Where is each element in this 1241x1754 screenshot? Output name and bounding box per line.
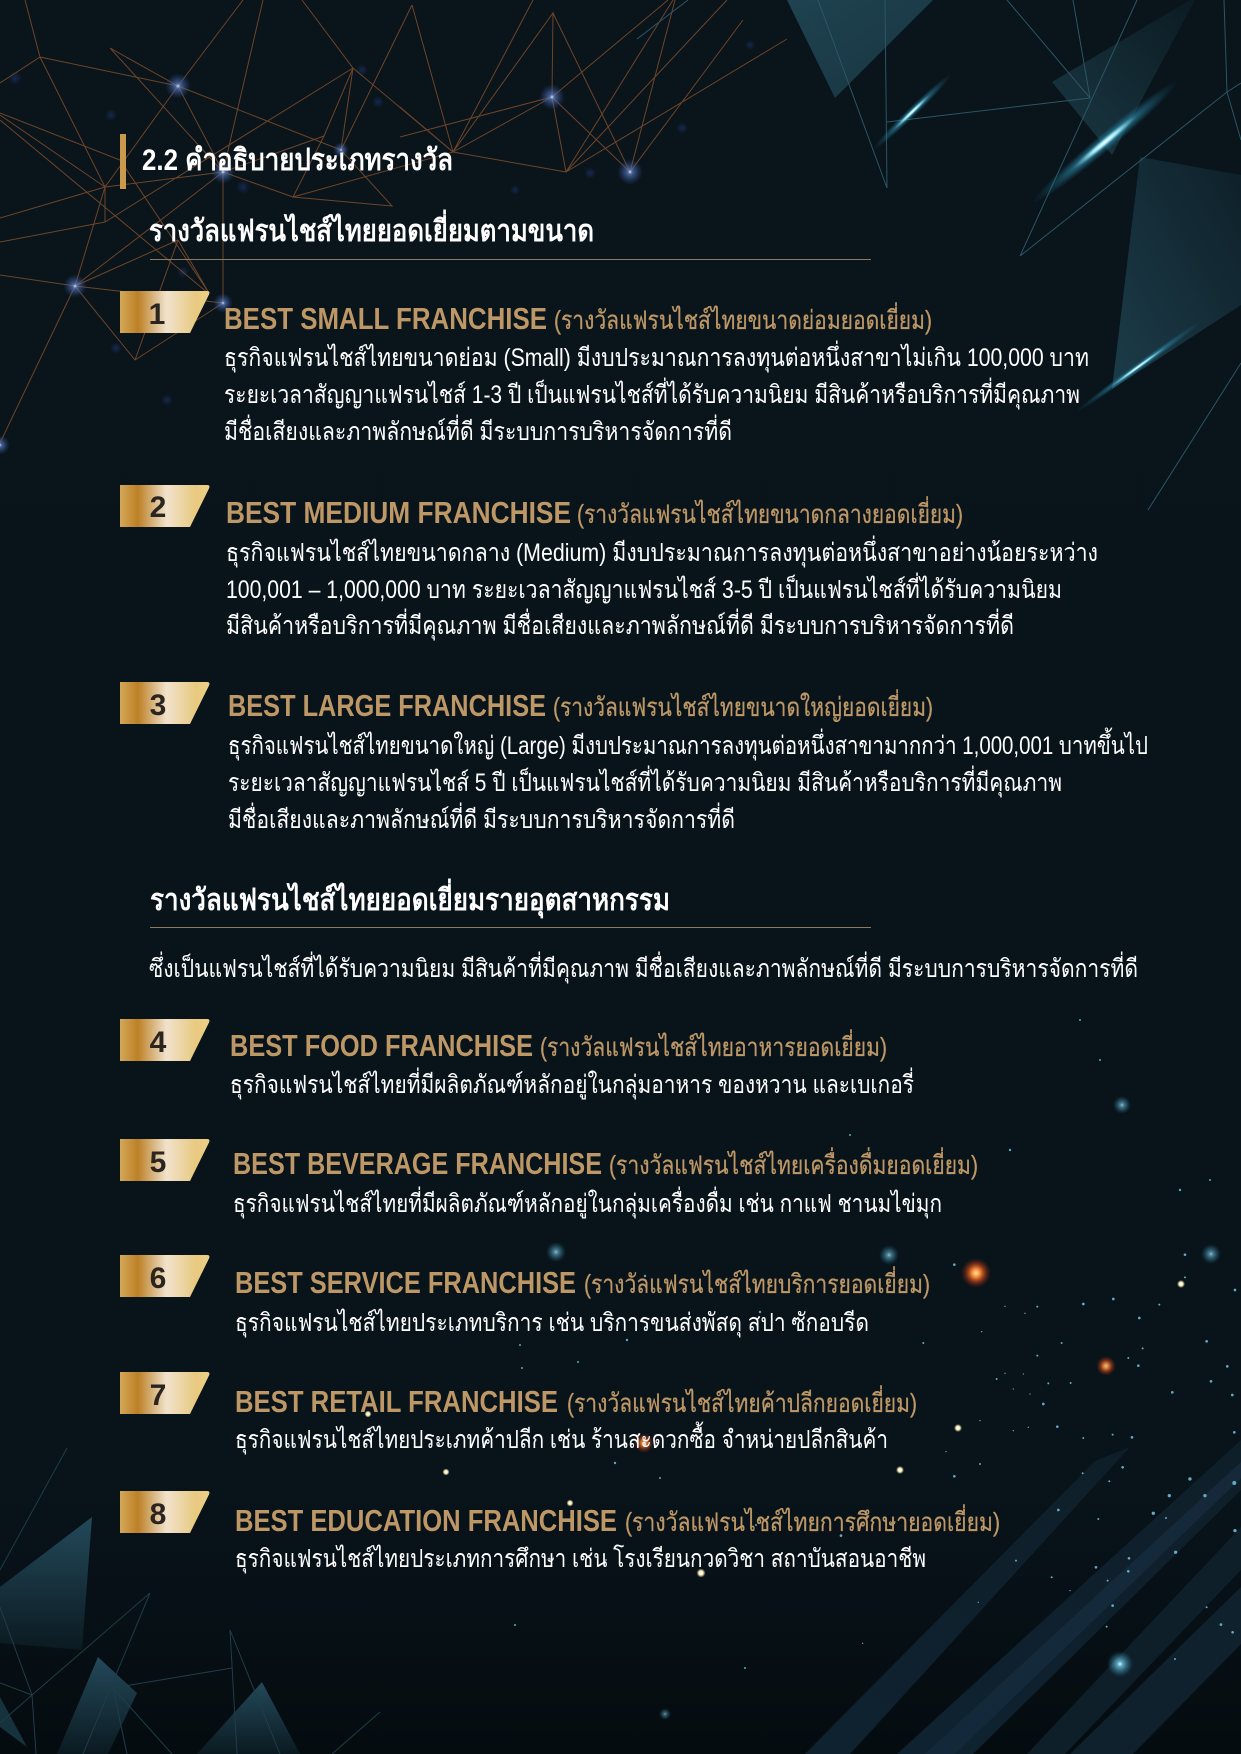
award 6 title bbox=[235, 1265, 930, 1300]
section title: 2.2 คำอธิบายประเภทรางวัล bbox=[142, 144, 453, 177]
number badge 8 bbox=[120, 1491, 209, 1533]
award 1 description: มีชื่อเสียงและภาพลักษณ์ที่ดี มีระบบการบริหารจัดการที่ดี bbox=[224, 414, 732, 446]
award 2 title: (รางวัลแฟรนไชส์ไทยขนาดกลางยอดเยี่ยม) bbox=[577, 496, 963, 529]
award 3: best large franchise bbox=[120, 682, 1148, 834]
top right teal shapes bbox=[787, 0, 1241, 389]
faint blue specks bbox=[8, 40, 755, 406]
light streaks bbox=[869, 70, 1203, 416]
award 7 title: (รางวัลแฟรนไชส์ไทยค้าปลีกยอดเยี่ยม) bbox=[567, 1385, 917, 1418]
number badge 6: 6 bbox=[150, 1262, 166, 1295]
award 8 title: BEST EDUCATION FRANCHISE bbox=[235, 1503, 617, 1538]
award 4: best food franchise bbox=[120, 1019, 914, 1100]
number badge 5: 5 bbox=[150, 1146, 166, 1179]
award 3 description bbox=[228, 727, 1148, 834]
award 2 description: ธุรกิจแฟรนไชส์ไทยขนาดกลาง (Medium) มีงบประมาณการลงทุนต่อหนึ่งสาขาอย่างน้อยระหว่าง bbox=[226, 535, 1098, 568]
award 2 description: 100,001 – 1,000,000 บาท ระยะเวลาสัญญาแฟรนไชส์ 3-5 ปี เป็นแฟรนไชส์ที่ได้รับความนิยม bbox=[226, 572, 1062, 604]
award 3 title: (รางวัลแฟรนไชส์ไทยขนาดใหญ่ยอดเยี่ยม) bbox=[553, 689, 933, 722]
number badge 4: 4 bbox=[150, 1026, 167, 1059]
heading: awards by size: รางวัลแฟรนไชส์ไทยยอดเยี่ยมตามขนาด bbox=[149, 209, 594, 248]
award 1 title: (รางวัลแฟรนไชส์ไทยขนาดย่อมยอดเยี่ยม) bbox=[554, 302, 932, 335]
award 1 title: BEST SMALL FRANCHISE bbox=[224, 301, 547, 336]
award 2 title bbox=[226, 495, 963, 530]
number badge 7 bbox=[120, 1372, 209, 1414]
award 6 description: ธุรกิจแฟรนไชส์ไทยประเภทบริการ เช่น บริการขนส่งพัสดุ สปา ซักอบรีด bbox=[235, 1308, 869, 1338]
heading: awards by industry: รางวัลแฟรนไชส์ไทยยอดเยี่ยมรายอุตสาหกรรม bbox=[150, 878, 670, 919]
award 2 description bbox=[226, 535, 1098, 641]
award 7 title: BEST RETAIL FRANCHISE bbox=[235, 1384, 558, 1419]
star field left and middle bbox=[514, 1019, 1211, 1669]
number badge 1 bbox=[120, 291, 209, 333]
award 4 title: BEST FOOD FRANCHISE bbox=[230, 1028, 533, 1063]
award 8 description: ธุรกิจแฟรนไชส์ไทยประเภทการศึกษา เช่น โรงเรียนกวดวิชา สถาบันสอนอาชีพ bbox=[235, 1544, 926, 1574]
award 6 title: (รางวัลแฟรนไชส์ไทยบริการยอดเยี่ยม) bbox=[584, 1266, 930, 1299]
bright white stars bbox=[364, 1280, 1185, 1578]
number badge 6 bbox=[120, 1255, 209, 1297]
award 7: best retail franchise bbox=[120, 1372, 917, 1455]
number badge 3 bbox=[120, 682, 209, 724]
award 3 title bbox=[228, 688, 933, 723]
bottom left teal shapes bbox=[0, 1448, 380, 1754]
award 1: best small franchise bbox=[120, 291, 1089, 446]
award 5 title: BEST BEVERAGE FRANCHISE bbox=[233, 1146, 602, 1181]
award 2 title: BEST MEDIUM FRANCHISE bbox=[226, 495, 571, 530]
award 3 description: ระยะเวลาสัญญาแฟรนไชส์ 5 ปี เป็นแฟรนไชส์ที่ได้รับความนิยม มีสินค้าหรือบริการที่มีคุณภาพ bbox=[228, 765, 1062, 798]
award 1 description bbox=[224, 340, 1089, 446]
number badge 2: 2 bbox=[150, 491, 166, 524]
award 8 title bbox=[235, 1503, 1000, 1538]
award 8 title: (รางวัลแฟรนไชส์ไทยการศึกษายอดเยี่ยม) bbox=[625, 1504, 1000, 1537]
award 6: best service franchise bbox=[120, 1255, 930, 1338]
glowing orange stars bbox=[634, 1258, 1116, 1453]
award 1 description: ระยะเวลาสัญญาแฟรนไชส์ 1-3 ปี เป็นแฟรนไชส์ที่ได้รับความนิยม มีสินค้าหรือบริการที่มีคุณภาพ bbox=[224, 377, 1080, 410]
award 3 title: BEST LARGE FRANCHISE bbox=[228, 688, 546, 723]
number badge 8: 8 bbox=[150, 1498, 166, 1531]
number badge 2 bbox=[120, 485, 209, 527]
award 1 description: ธุรกิจแฟรนไชส์ไทยขนาดย่อม (Small) มีงบประมาณการลงทุนต่อหนึ่งสาขาไม่เกิน 100,000 บาท bbox=[224, 340, 1089, 373]
award 3 description: มีชื่อเสียงและภาพลักษณ์ที่ดี มีระบบการบริหารจัดการที่ดี bbox=[228, 802, 735, 834]
award 5 title: (รางวัลแฟรนไชส์ไทยเครื่องดื่มยอดเยี่ยม) bbox=[609, 1147, 978, 1180]
award 4 title bbox=[230, 1028, 887, 1063]
star field bbox=[840, 1253, 1237, 1660]
award 7 description: ธุรกิจแฟรนไชส์ไทยประเภทค้าปลีก เช่น ร้านสะดวกซื้อ จำหน่ายปลีกสินค้า bbox=[235, 1421, 888, 1455]
number badge 1: 1 bbox=[149, 298, 165, 331]
number badge 4 bbox=[120, 1019, 209, 1061]
number badge 5 bbox=[120, 1139, 209, 1181]
award 6 title: BEST SERVICE FRANCHISE bbox=[235, 1265, 576, 1300]
award 4 description: ธุรกิจแฟรนไชส์ไทยที่มีผลิตภัณฑ์หลักอยู่ในกลุ่มอาหาร ของหวาน และเบเกอรี่ bbox=[230, 1067, 914, 1100]
award 7 title bbox=[235, 1384, 917, 1419]
section accent bar bbox=[120, 134, 126, 189]
award 4 title: (รางวัลแฟรนไชส์ไทยอาหารยอดเยี่ยม) bbox=[540, 1029, 887, 1062]
award 5 description: ธุรกิจแฟรนไชส์ไทยที่มีผลิตภัณฑ์หลักอยู่ในกลุ่มเครื่องดื่ม เช่น กาแฟ ชานมไข่มุก bbox=[233, 1186, 942, 1219]
glowing blue stars bbox=[546, 1096, 1221, 1720]
award 8: best education franchise bbox=[120, 1491, 1000, 1574]
award 2 description: มีสินค้าหรือบริการที่มีคุณภาพ มีชื่อเสียงและภาพลักษณ์ที่ดี มีระบบการบริหารจัดการที่ดี bbox=[226, 608, 1014, 641]
number badge 3: 3 bbox=[150, 689, 166, 722]
award 1 title bbox=[224, 301, 932, 336]
network star nodes bbox=[0, 73, 643, 455]
top right teal lines bbox=[637, 0, 1241, 510]
bottom right diagonal bands bbox=[805, 1440, 1241, 1754]
award 5: best beverage franchise bbox=[120, 1139, 978, 1219]
award 2: best medium franchise bbox=[120, 485, 1098, 641]
number badge 7: 7 bbox=[150, 1379, 166, 1412]
gold line network bbox=[0, 0, 787, 443]
award 5 title bbox=[233, 1146, 978, 1181]
